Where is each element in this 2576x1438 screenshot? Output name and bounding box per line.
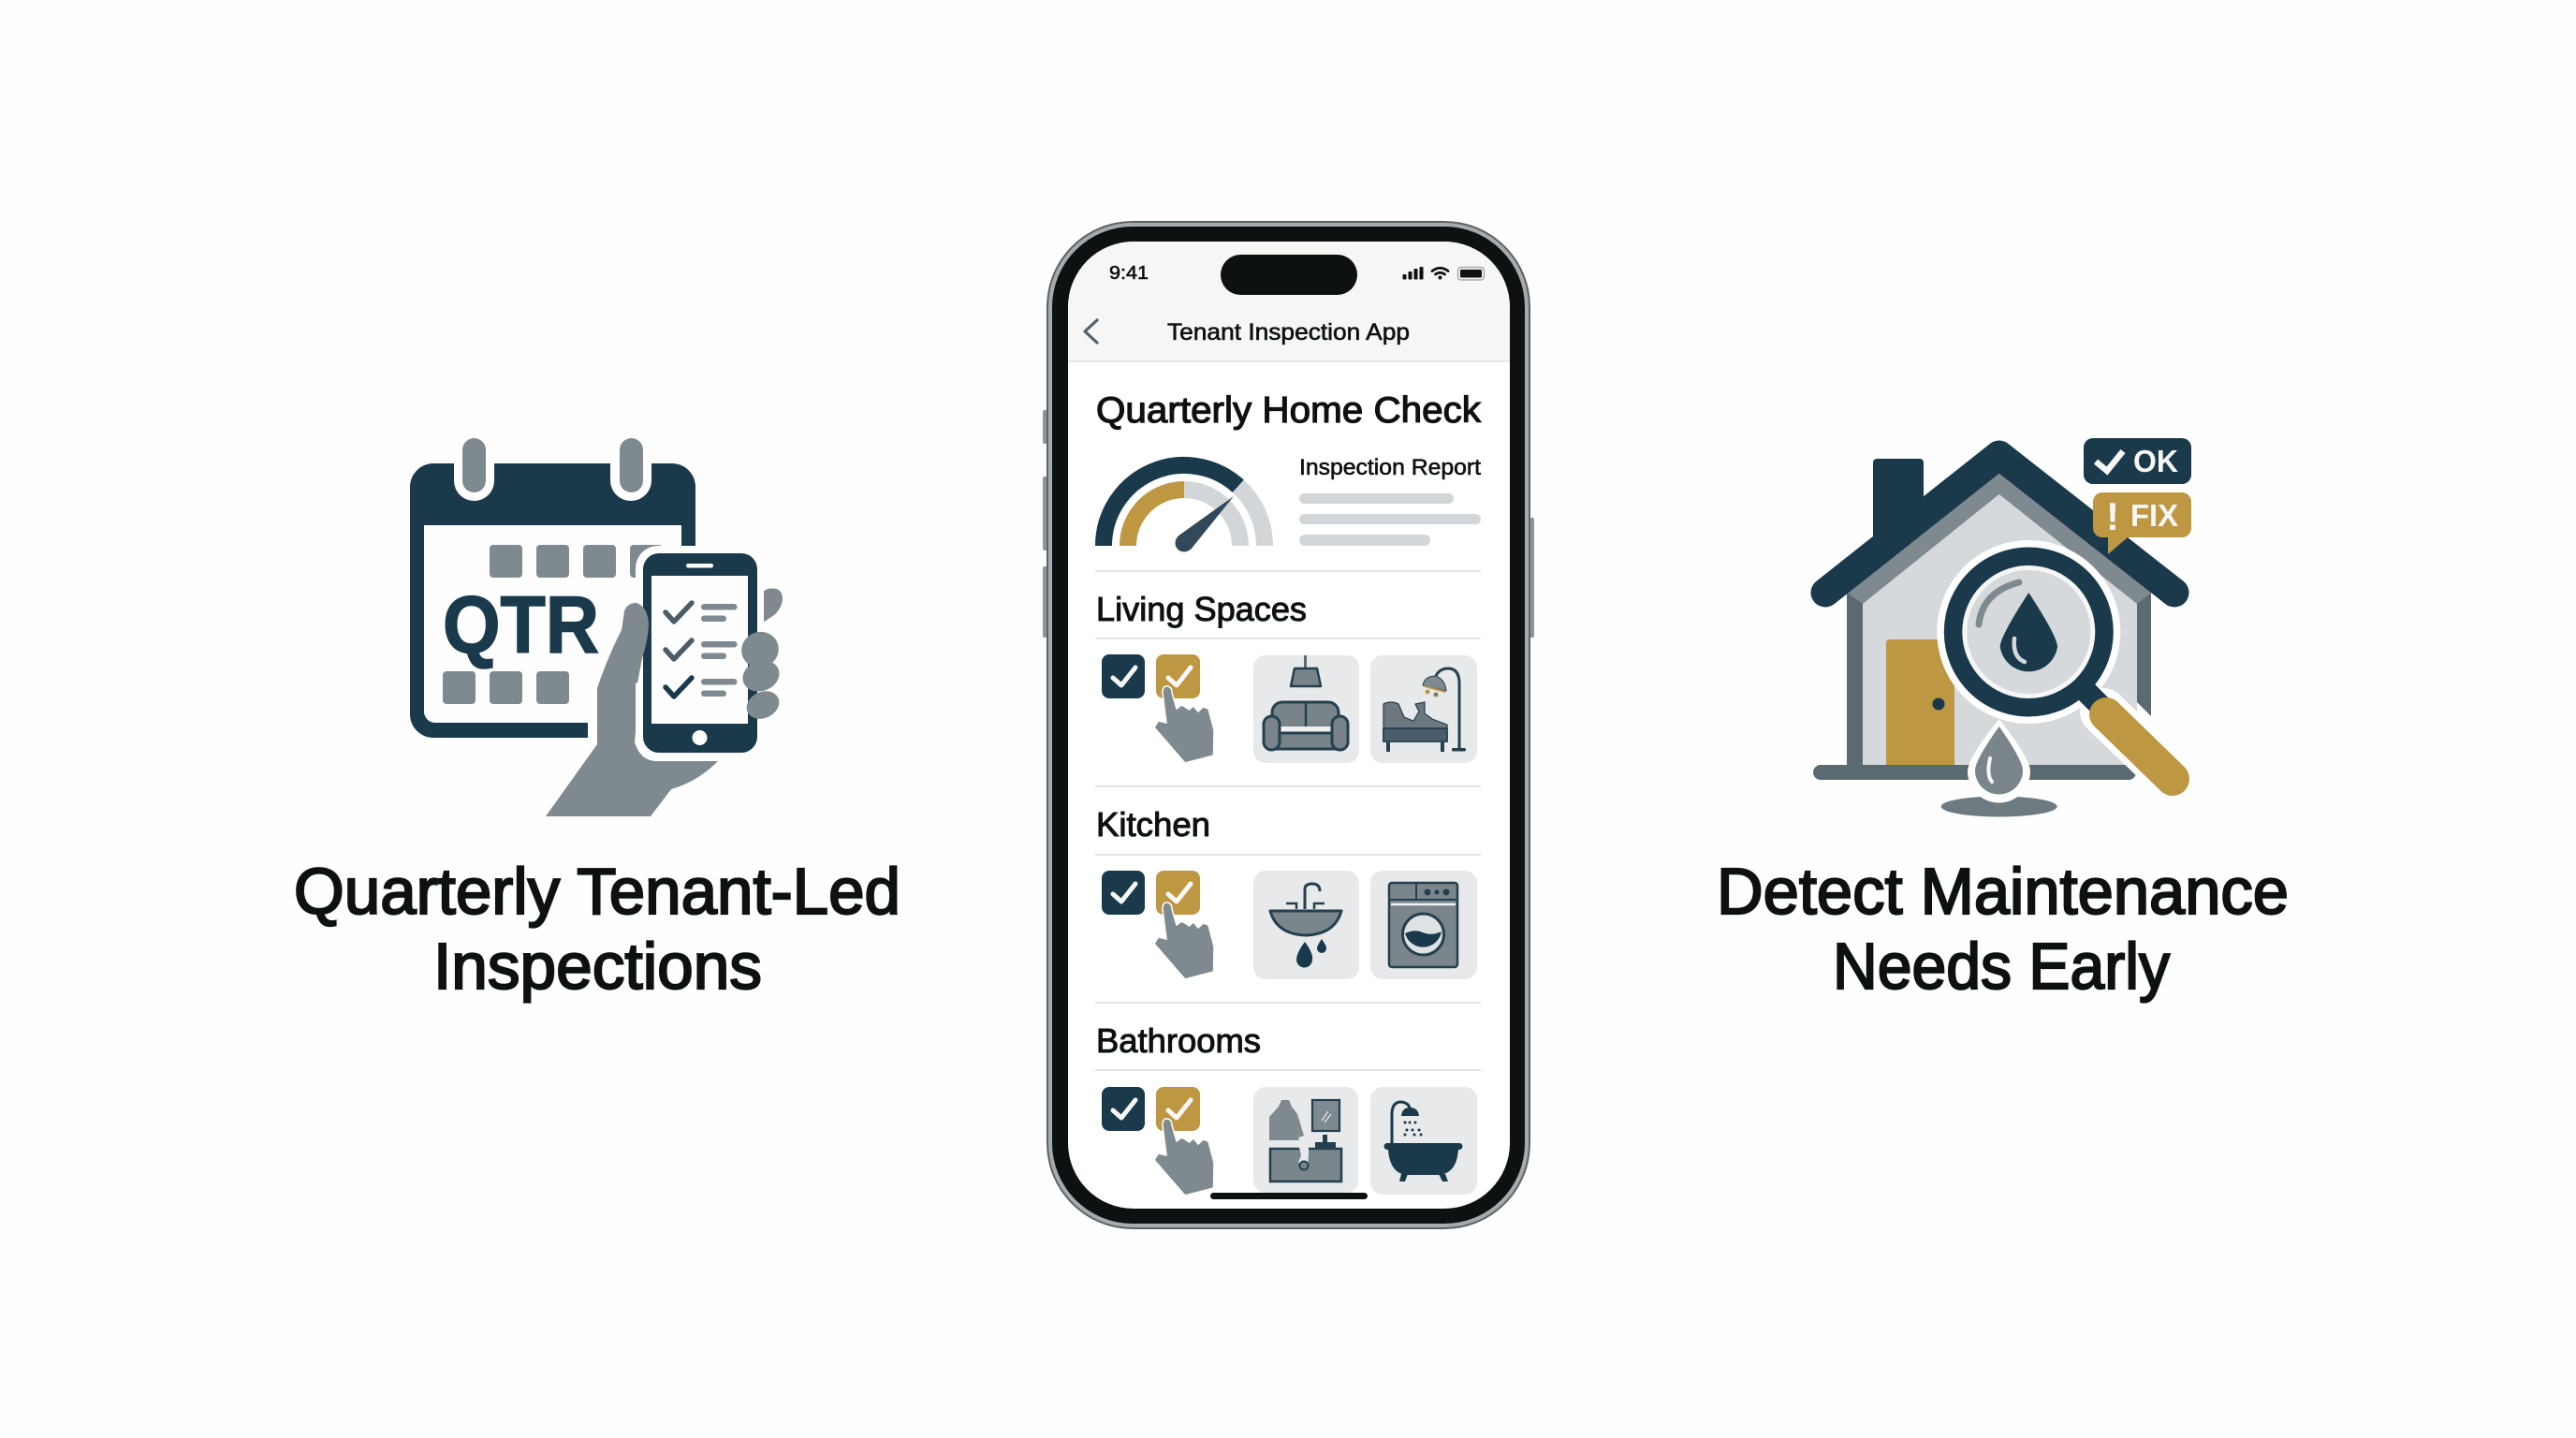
heading: left caption: Inspections [433,930,762,1003]
section heading: Bathrooms [1096,1021,1261,1060]
section heading: Living Spaces [1096,590,1307,628]
icon: tapping hand [1154,902,1214,979]
app title: Tenant Inspection App [1167,319,1410,345]
checkbox: gold [1156,871,1200,915]
section: living spaces [1096,590,1477,763]
phone frame [1046,221,1530,1229]
badge: FIX: FIX [2130,498,2178,533]
puddle [1941,796,2057,816]
calendar date squares [443,545,663,704]
roof [1825,455,2174,593]
QTR label: QTR [443,580,599,670]
tile: vanity, mirror and robe [1253,1087,1358,1193]
heading: left caption: Quarterly Tenant-Led [294,855,900,928]
badge: OK: OK [2133,444,2178,478]
badge: FIX [2093,492,2191,554]
home indicator [1210,1193,1368,1199]
heading: right caption: Detect Maintenance [1717,855,2289,928]
tile: bed and floor lamp [1370,655,1477,763]
icon: tapping hand [1154,686,1214,763]
icon: tapping hand [1154,1119,1214,1196]
report label: Inspection Report [1299,455,1481,480]
checkbox: navy [1102,871,1145,915]
heading: left caption [294,855,900,1003]
screen heading: Quarterly Home Check [1096,390,1482,431]
tile: leaking sink [1253,871,1359,979]
badge: FIX: ! [2106,494,2119,538]
icon: calendar with phone in hand [410,426,784,816]
house walls [1847,470,2151,765]
magnifier [1937,540,2174,779]
phone side buttons [1043,410,1534,638]
section dividers [1095,571,1481,1070]
icon: house with magnifier and water leak [1813,438,2191,816]
door [1886,639,1954,765]
dynamic island [1221,255,1357,295]
checkbox: gold [1156,654,1200,698]
gauge [1104,465,1265,552]
checkbox: navy [1102,1087,1145,1131]
heading: right caption [1717,855,2289,1003]
tile: bathtub with shower [1370,1087,1477,1195]
section: bathrooms [1096,1021,1477,1196]
tile: sofa and pendant lamp [1253,655,1359,763]
small phone [618,546,764,760]
hand fingers [736,625,784,724]
calendar body [410,426,695,740]
badge: OK [2084,438,2191,484]
hand behind phone [546,588,783,816]
status icons [1402,267,1485,280]
chimney [1873,459,1924,548]
phone mockup [1043,221,1534,1229]
checkbox: navy [1102,654,1145,698]
section heading: Kitchen [1096,805,1210,844]
leak drop [1968,719,2030,802]
section: kitchen [1096,805,1477,979]
floor line [1813,765,2136,780]
status bar time: 9:41 [1109,262,1149,284]
tile: washing machine [1370,871,1477,979]
checkbox: gold [1156,1087,1200,1131]
heading: right caption: Needs Early [1833,930,2170,1003]
back chevron [1085,320,1097,343]
app header bar [1068,242,1510,361]
report placeholder lines [1299,493,1481,546]
